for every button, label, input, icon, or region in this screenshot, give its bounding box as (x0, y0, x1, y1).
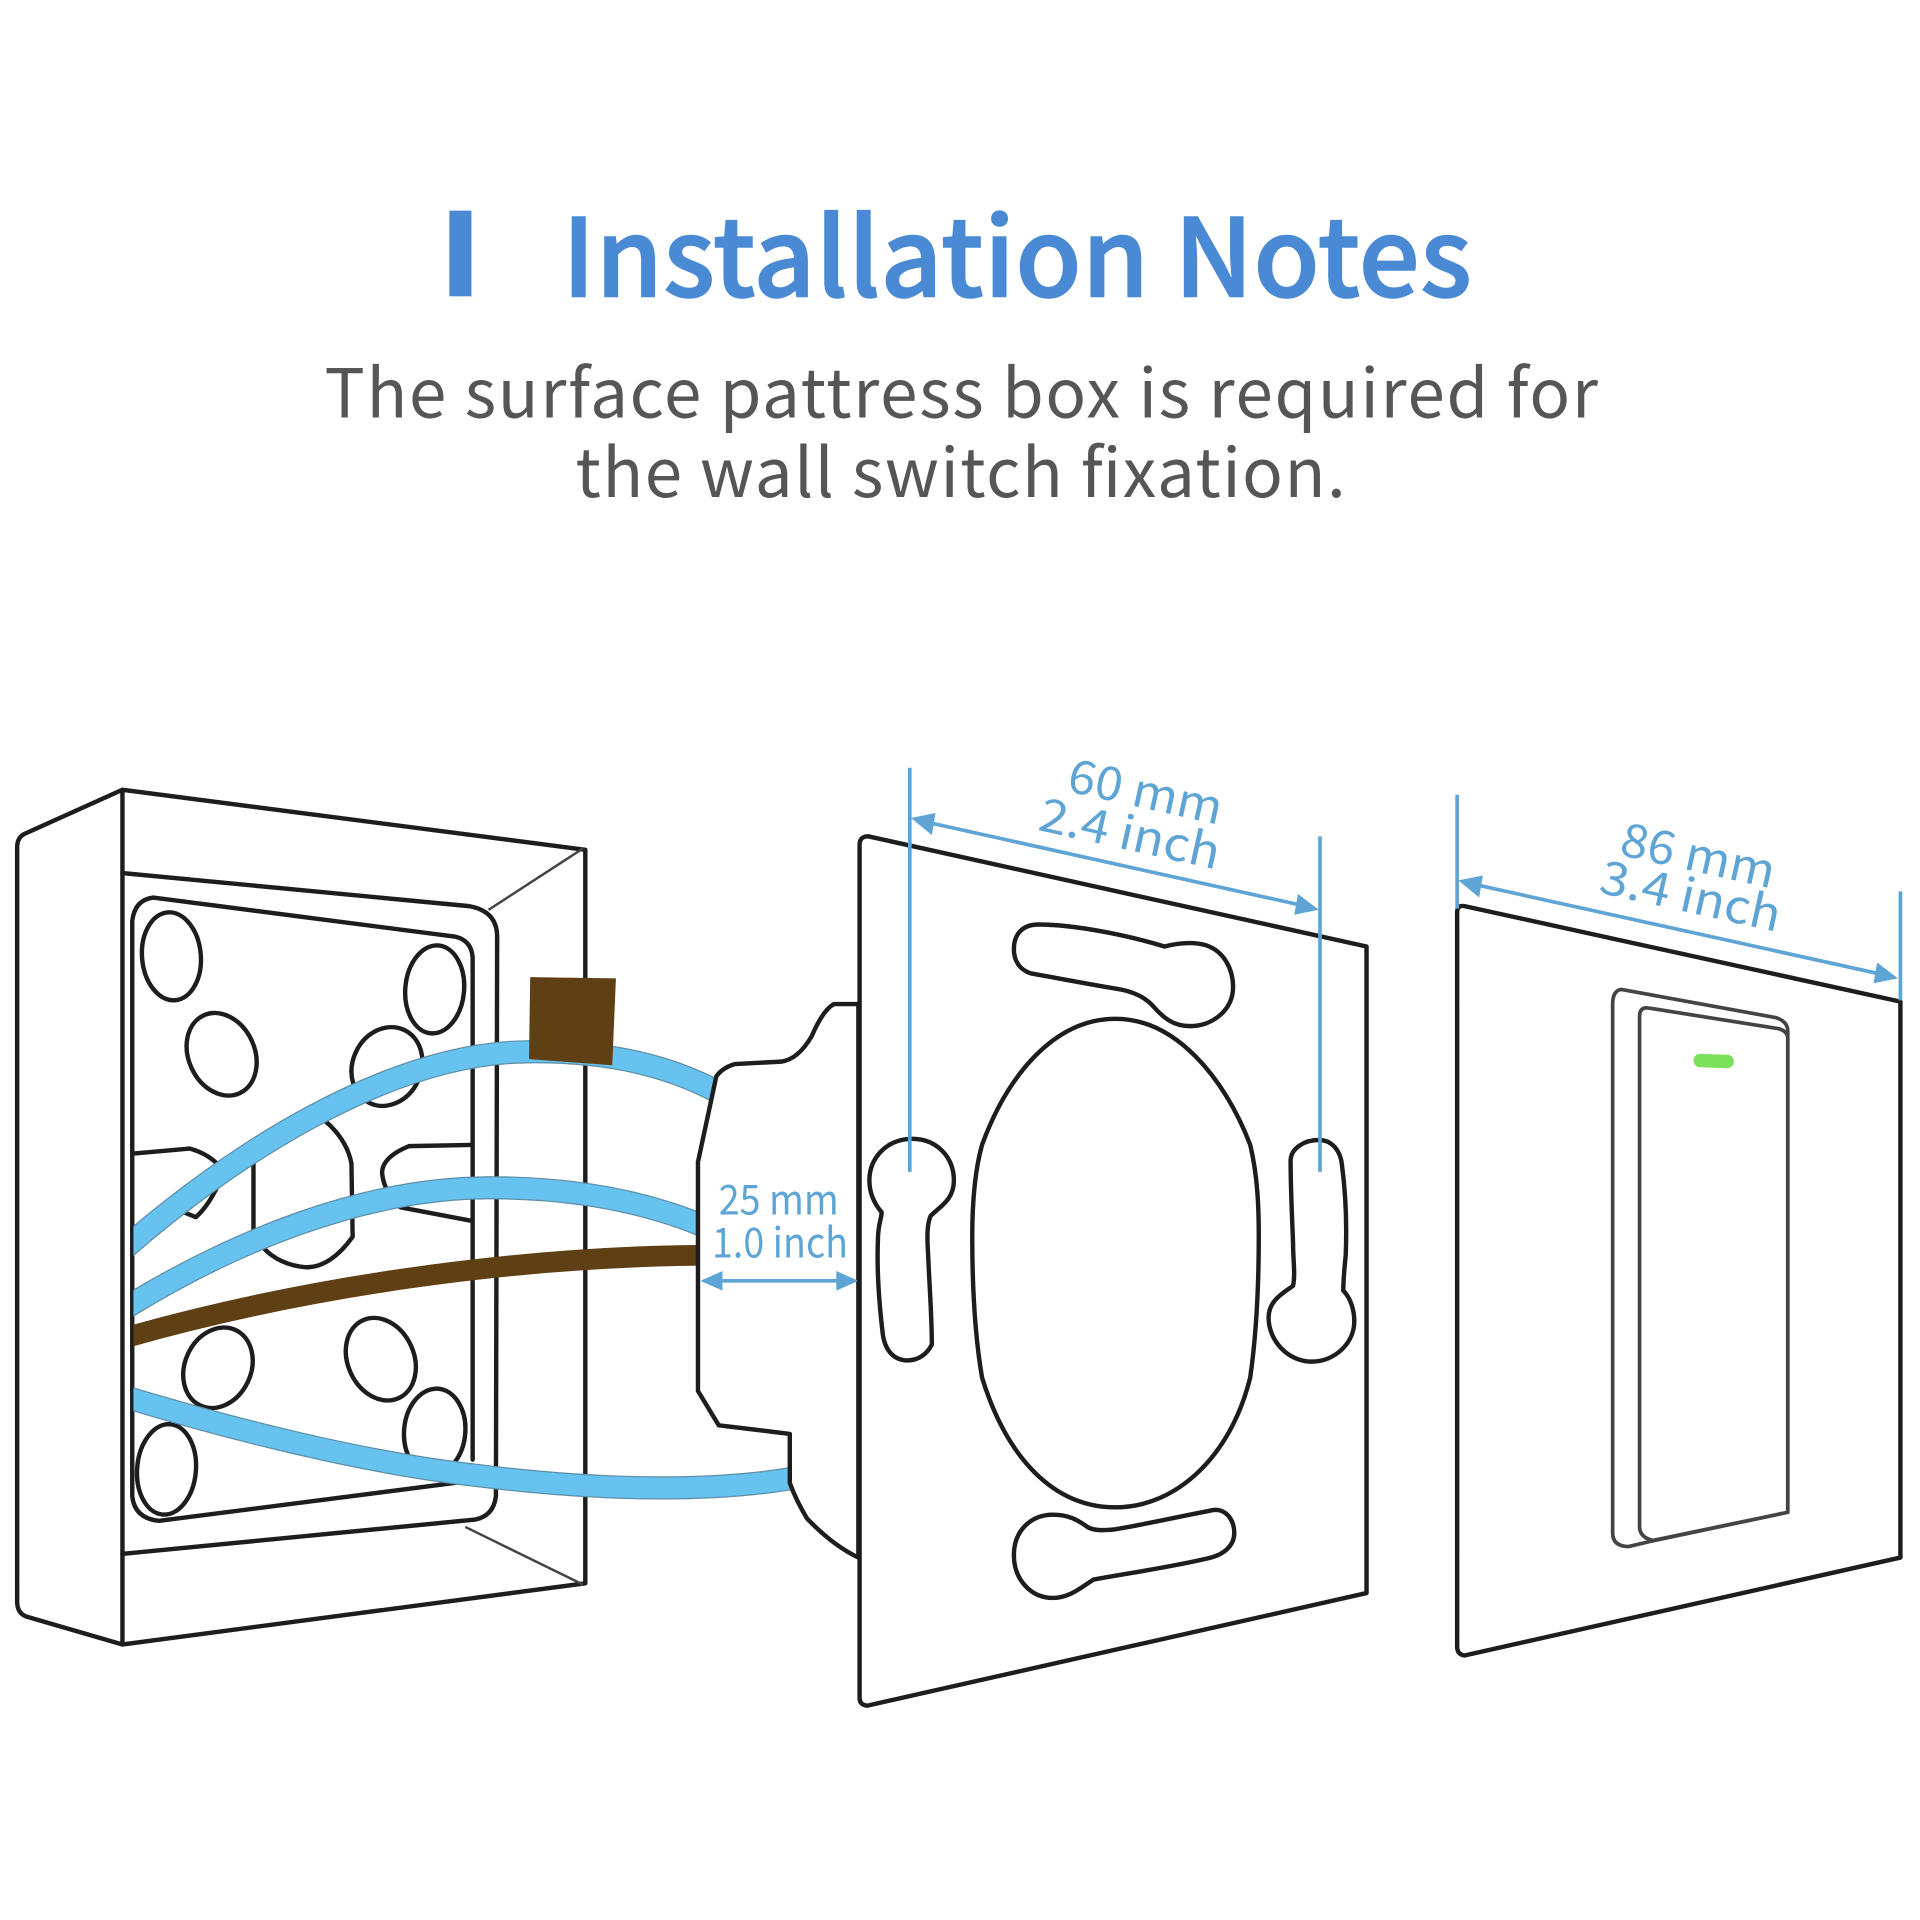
centre opening (972, 1019, 1259, 1507)
green indicator light (1693, 1054, 1734, 1068)
86 mm label: 86 mm (1615, 803, 1783, 902)
subtitle text: the wall switch fixation. (576, 420, 1346, 517)
box inner frame (132, 898, 473, 1521)
mounting plate (860, 836, 1367, 1706)
brown wire (110, 1255, 722, 1342)
bottom keyhole slot (1014, 1510, 1234, 1598)
subtitle text (324, 341, 1599, 517)
depth arrow (700, 1271, 858, 1291)
60 mm label: 60 mm (1063, 739, 1230, 838)
depth label (712, 1167, 848, 1270)
wires (110, 1052, 814, 1488)
box clips (135, 1120, 471, 1267)
title: Installation Notes (562, 172, 1472, 328)
depth label: 1.0 inch (712, 1210, 848, 1270)
right keyhole slot (1269, 1140, 1354, 1362)
blue wire 2 (110, 1188, 722, 1318)
switch back frame (1613, 989, 1788, 1547)
knockout holes (133, 910, 469, 1517)
switch body side view (698, 1004, 858, 1558)
60 mm label (1034, 739, 1230, 883)
switch rocker (1640, 1008, 1788, 1540)
depth dimension (700, 1167, 858, 1291)
blue wire 3 (110, 1392, 814, 1488)
top keyhole slot (1014, 924, 1233, 1026)
subtitle text: The surface pattress box is required for (324, 341, 1599, 438)
depth label: 25 mm (719, 1167, 839, 1227)
86 mm label: 3.4 inch (1595, 840, 1788, 946)
86 mm dimension (1457, 795, 1900, 1000)
86 mm label (1595, 803, 1788, 946)
left keyhole slot (869, 1139, 954, 1360)
blue wire 1 (110, 1052, 735, 1261)
cover plate (1457, 906, 1900, 1656)
60 mm label: 2.4 inch (1034, 778, 1228, 883)
brown cable clip (529, 977, 616, 1065)
60 mm dimension (910, 739, 1320, 1172)
surface pattress box (17, 790, 585, 1644)
